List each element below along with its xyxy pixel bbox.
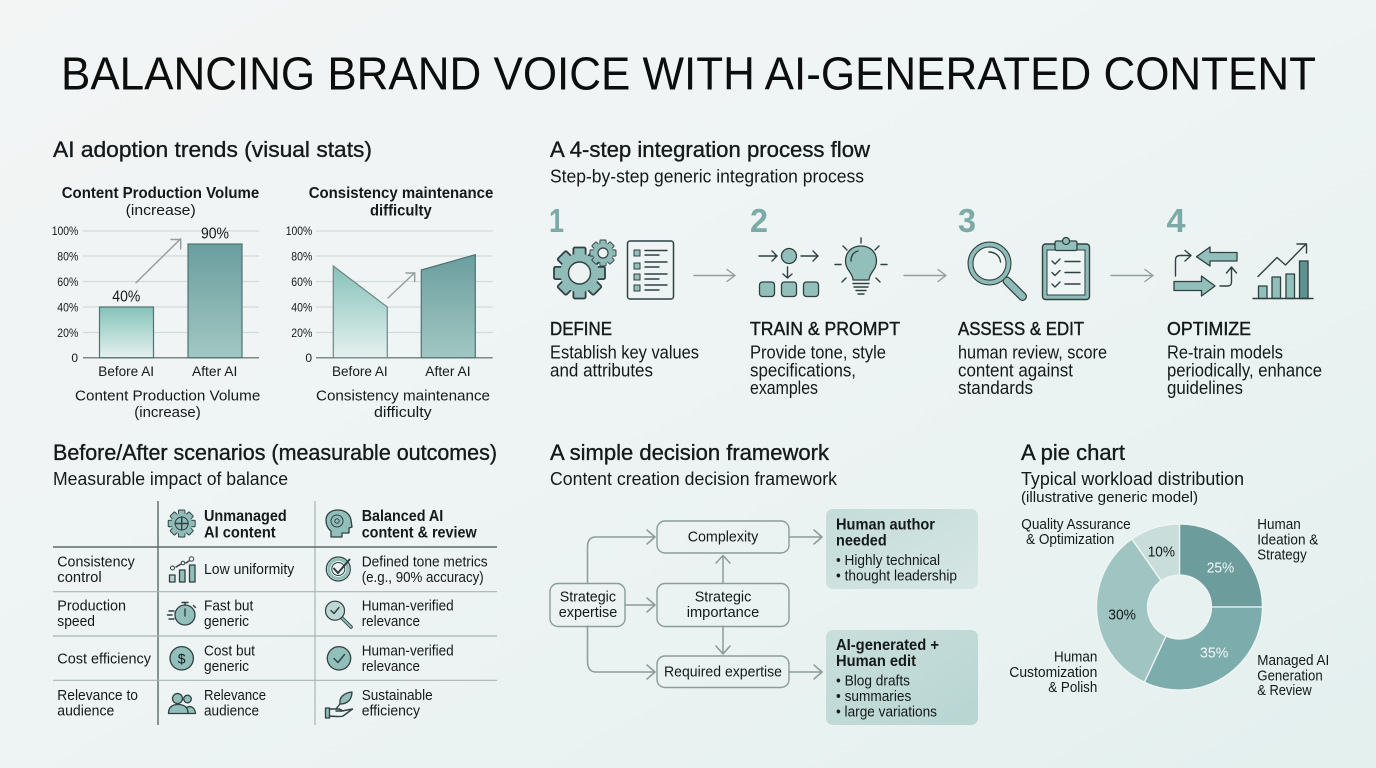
gridlines and axis labels: 0 xyxy=(71,351,78,365)
row: relevance to audience: audience xyxy=(57,703,114,720)
row: consistency control xyxy=(57,554,488,586)
heading: pie chart: Typical workload distribution xyxy=(1021,469,1244,489)
box: strategic importance: Strategic xyxy=(695,589,752,606)
row: relevance to audience: audience xyxy=(204,703,259,720)
arrow to step 4 xyxy=(1111,270,1153,282)
step description: Provide tone, style xyxy=(750,342,886,362)
step 2: train and prompt xyxy=(750,202,946,398)
value labels xyxy=(112,226,229,306)
row: production speed: Human-verified xyxy=(362,598,454,615)
gridlines and axis labels xyxy=(286,224,493,365)
gridlines and axis labels: 100% xyxy=(286,224,313,238)
outcome: AI-generated plus human edit: • summaries xyxy=(836,688,911,705)
box: required expertise: Required expertise xyxy=(664,664,782,681)
heading: decision framework: A simple decision framework xyxy=(550,440,830,465)
label: quality assurance: & Optimization xyxy=(1026,532,1114,548)
value labels: 40% xyxy=(112,289,140,306)
label: managed AI: & Review xyxy=(1257,683,1312,699)
step description xyxy=(1167,342,1322,398)
outcome: human author needed: • thought leadership xyxy=(836,568,957,585)
row: production speed: Fast but xyxy=(204,598,254,615)
shape: after AI xyxy=(421,255,475,358)
box: strategic expertise xyxy=(550,584,625,626)
column header: balanced: content & review xyxy=(362,524,478,542)
gridlines and axis labels: 20% xyxy=(291,326,313,340)
row: production speed: relevance xyxy=(362,613,420,630)
step description: Re-train models xyxy=(1167,342,1283,362)
label: quality assurance: Quality Assurance xyxy=(1021,517,1131,533)
box: complexity xyxy=(657,521,789,553)
percent labels: 35% xyxy=(1200,645,1228,662)
number 4: 4 xyxy=(1166,202,1186,239)
outcome: AI-generated plus human edit: Human edit xyxy=(836,653,916,670)
category labels: After AI xyxy=(425,363,471,379)
column header: balanced xyxy=(326,508,478,542)
heading: decision framework xyxy=(550,440,838,489)
column header: balanced: Balanced AI xyxy=(362,508,443,525)
category labels xyxy=(98,363,237,379)
step description: Establish key values xyxy=(550,342,699,362)
chart caption: Content Production Volume xyxy=(75,388,260,405)
chart title xyxy=(309,185,494,220)
outcome: human author needed: • Highly technical xyxy=(836,552,940,569)
row: cost efficiency: Cost but xyxy=(204,643,256,660)
shape: before AI xyxy=(333,266,387,358)
gridlines and axis labels: 20% xyxy=(57,326,79,340)
box: required expertise xyxy=(657,656,789,688)
step name: ASSESS & EDIT xyxy=(958,319,1084,339)
step 3: assess and edit xyxy=(958,202,1153,398)
icon: growth chart xyxy=(1253,244,1313,298)
bar: after AI 90% xyxy=(188,244,242,358)
gridlines and axis labels: 0 xyxy=(305,351,312,365)
step name: TRAIN & PROMPT xyxy=(750,319,900,339)
outcome: AI-generated plus human edit: • large variations xyxy=(836,704,937,721)
chart title: difficulty xyxy=(370,202,432,220)
icon: clipboard checklist xyxy=(1042,238,1090,300)
heading: pie chart: (illustrative generic model) xyxy=(1021,490,1198,506)
heading: decision framework: Content creation decision framework xyxy=(550,469,838,489)
arrow to step 3 xyxy=(904,270,946,282)
chart title xyxy=(62,185,260,219)
row: production speed: speed xyxy=(57,613,95,630)
row: production speed xyxy=(57,598,454,630)
step description: examples xyxy=(750,378,818,398)
arrow: increase xyxy=(388,273,415,298)
step name: DEFINE xyxy=(550,319,612,339)
label: human customization: Customization xyxy=(1009,665,1097,681)
column header: unmanaged xyxy=(168,508,287,542)
outcome: AI-generated plus human edit xyxy=(826,630,978,725)
row: cost efficiency: $ xyxy=(178,650,186,666)
percent labels xyxy=(1108,544,1234,662)
decision flowchart xyxy=(550,509,978,725)
outcome: human author needed: needed xyxy=(836,532,887,549)
step 1: define xyxy=(549,202,735,380)
icon: cycle arrows xyxy=(1174,247,1237,296)
step description: specifications, xyxy=(750,360,856,380)
heading: 4-step process flow: Step-by-step generic integration process xyxy=(550,166,864,186)
arrow to step 2 xyxy=(694,270,735,282)
category labels: Before AI xyxy=(332,363,388,379)
box: strategic expertise: expertise xyxy=(559,604,617,621)
heading: 4-step process flow: A 4-step integration process flow xyxy=(550,137,870,162)
label: human ideation: Ideation & xyxy=(1257,533,1319,549)
chart title: (increase) xyxy=(126,202,196,219)
chart caption: (increase) xyxy=(134,404,201,421)
slice: 30% human customization xyxy=(1097,539,1166,682)
box: strategic importance xyxy=(657,584,789,626)
percent labels: 10% xyxy=(1148,544,1175,561)
chart caption: Consistency maintenance xyxy=(316,388,490,405)
value labels: 90% xyxy=(201,226,229,243)
icon: flow diagram xyxy=(759,248,818,296)
step description: human review, score xyxy=(958,342,1107,362)
number 1: 1 xyxy=(549,202,564,239)
label: human customization: & Polish xyxy=(1048,680,1097,696)
bar: before AI 40% xyxy=(100,307,154,358)
icon: checklist xyxy=(628,241,674,299)
box: strategic importance: importance xyxy=(687,604,759,621)
chart title: Content Production Volume xyxy=(62,185,260,202)
step description: standards xyxy=(958,378,1033,398)
row: consistency control: Consistency xyxy=(57,554,135,571)
category labels: Before AI xyxy=(98,363,154,379)
heading: before and after scenarios: Measurable impact of balance xyxy=(53,469,288,489)
icon: magnifier xyxy=(970,244,1022,296)
label: managed AI: Managed AI xyxy=(1257,653,1329,669)
number 2: 2 xyxy=(750,202,768,239)
donut chart: workload distribution xyxy=(1009,517,1329,699)
row: consistency control: Defined tone metrics xyxy=(362,554,488,571)
slice: 25% human ideation xyxy=(1180,524,1262,607)
gridlines and axis labels: 60% xyxy=(291,275,313,289)
heading: before and after scenarios xyxy=(53,440,497,489)
step description: periodically, enhance xyxy=(1167,360,1322,380)
row: cost efficiency xyxy=(57,643,454,675)
category labels xyxy=(332,363,471,379)
label: human ideation: Strategy xyxy=(1257,547,1307,563)
row: relevance to audience: Sustainable xyxy=(362,687,433,704)
heading: pie chart xyxy=(1021,440,1244,506)
label: human ideation xyxy=(1257,517,1319,563)
number 3: 3 xyxy=(958,202,976,239)
outcome: human author needed xyxy=(826,509,978,589)
gridlines and axis labels xyxy=(52,224,259,365)
step description: guidelines xyxy=(1167,378,1243,398)
row: relevance to audience xyxy=(57,687,433,720)
percent labels: 30% xyxy=(1108,606,1136,623)
step description xyxy=(958,342,1107,398)
row: relevance to audience: Relevance xyxy=(204,687,266,704)
outcome: human author needed: Human author xyxy=(836,516,935,533)
row: consistency control: control xyxy=(57,569,102,586)
row: cost efficiency: relevance xyxy=(362,658,420,675)
step description: content against xyxy=(958,360,1073,380)
row: cost efficiency: Human-verified xyxy=(362,643,454,660)
label: human customization xyxy=(1009,650,1097,696)
gridlines and axis labels: 100% xyxy=(52,224,79,238)
row: cost efficiency: Cost efficiency xyxy=(57,650,151,667)
chart caption: difficulty xyxy=(374,404,432,421)
outcome: AI-generated plus human edit: • Blog drafts xyxy=(836,673,910,690)
chart caption xyxy=(316,388,490,421)
row: relevance to audience: Relevance to xyxy=(57,687,138,704)
icon: light bulb xyxy=(835,238,887,294)
step description: and attributes xyxy=(550,360,653,380)
bar chart: content production volume xyxy=(52,185,260,421)
step 4: optimize xyxy=(1166,202,1322,398)
slice: 35% managed AI xyxy=(1144,607,1262,690)
icon: gears xyxy=(554,240,616,298)
row: consistency control: (e.g., 90% accuracy) xyxy=(362,569,484,586)
box: complexity: Complexity xyxy=(688,529,759,546)
connector arrows xyxy=(588,530,822,679)
step description xyxy=(550,342,699,380)
column header: unmanaged: AI content xyxy=(204,524,276,542)
row: cost efficiency: generic xyxy=(204,658,249,675)
row: relevance to audience: efficiency xyxy=(362,703,420,720)
arrow: increase xyxy=(136,239,181,283)
category labels: After AI xyxy=(192,363,237,379)
label: managed AI xyxy=(1257,653,1329,699)
column header: unmanaged: Unmanaged xyxy=(204,508,287,525)
label: human customization: Human xyxy=(1054,650,1097,666)
heading: AI adoption trends: AI adoption trends (visual stats) xyxy=(53,137,372,162)
gridlines and axis labels: 40% xyxy=(57,300,79,314)
comparison table xyxy=(53,501,497,725)
chart caption xyxy=(75,388,260,421)
row: production speed: generic xyxy=(204,613,249,630)
chart: consistency maintenance difficulty xyxy=(286,185,494,421)
box: strategic expertise: Strategic xyxy=(560,589,616,606)
heading: 4-step process flow xyxy=(550,137,870,186)
slice: 10% quality assurance xyxy=(1132,524,1180,581)
gridlines and axis labels: 40% xyxy=(291,300,313,314)
label: managed AI: Generation xyxy=(1257,668,1323,684)
row: production speed: Production xyxy=(57,598,126,615)
gridlines and axis labels: 60% xyxy=(57,275,79,289)
label: human ideation: Human xyxy=(1257,517,1301,533)
step description xyxy=(750,342,886,398)
percent labels: 25% xyxy=(1207,559,1234,576)
step name: OPTIMIZE xyxy=(1167,319,1251,339)
gridlines and axis labels: 80% xyxy=(57,250,79,264)
title: BALANCING BRAND VOICE WITH AI-GENERATED CONTENT xyxy=(61,48,1316,100)
row: consistency control: Low uniformity xyxy=(204,561,295,578)
outcome: AI-generated plus human edit: AI-generated + xyxy=(836,637,939,654)
heading: pie chart: A pie chart xyxy=(1021,440,1125,465)
gridlines and axis labels: 80% xyxy=(291,250,313,264)
chart title: Consistency maintenance xyxy=(309,185,494,202)
heading: before and after scenarios: Before/After scenarios (measurable outcomes) xyxy=(53,440,497,465)
label: quality assurance xyxy=(1021,517,1131,548)
